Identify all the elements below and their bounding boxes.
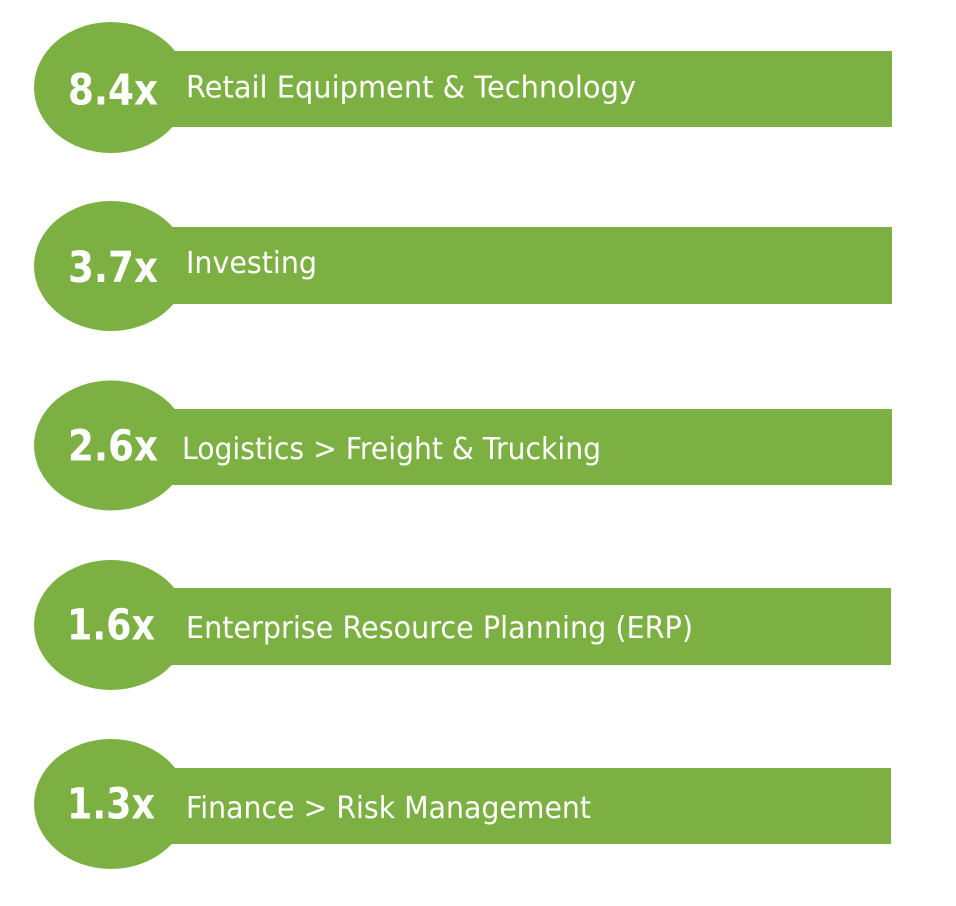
label: Logistics > Freight & Trucking	[182, 432, 601, 467]
circle badge	[34, 739, 188, 869]
row: Logistics > Freight & Trucking	[34, 380, 892, 510]
bar	[140, 227, 892, 304]
value: 2.6x	[68, 422, 158, 472]
bar	[140, 51, 892, 127]
bar	[140, 588, 891, 665]
circle badge	[34, 560, 188, 690]
row: Enterprise Resource Planning (ERP)	[34, 560, 891, 690]
circle badge	[34, 22, 188, 153]
label: Retail Equipment & Technology	[186, 70, 636, 106]
label: Enterprise Resource Planning (ERP)	[186, 611, 693, 646]
bar	[140, 409, 892, 485]
value: 1.3x	[67, 780, 155, 830]
value: 1.6x	[67, 600, 155, 650]
row: Investing	[34, 201, 892, 331]
label: Finance > Risk Management	[186, 791, 591, 826]
circle badge	[34, 380, 188, 510]
bar	[140, 768, 891, 844]
row: Retail Equipment & Technology	[34, 22, 892, 153]
value: 3.7x	[68, 243, 158, 293]
circle badge	[34, 201, 188, 331]
row: Finance > Risk Management	[34, 739, 891, 869]
value: 8.4x	[68, 66, 158, 116]
label: Investing	[186, 246, 317, 281]
